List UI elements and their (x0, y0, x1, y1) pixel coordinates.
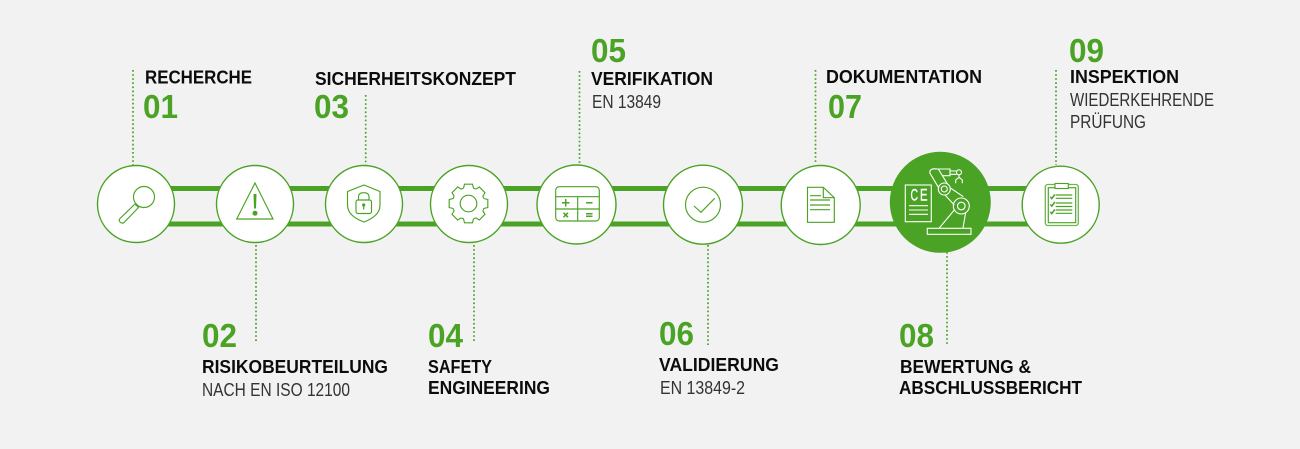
label: validierung (659, 315, 779, 398)
icon: calculator (537, 165, 616, 244)
label: inspektion: PRÜFUNG (1070, 112, 1146, 132)
label: risikobeurteilung: RISIKOBEURTEILUNG (202, 357, 388, 377)
label: risikobeurteilung (202, 317, 388, 400)
step 04: safety engineering (428, 166, 550, 398)
icon: warning triangle (216, 166, 294, 242)
label: validierung: VALIDIERUNG (659, 355, 779, 375)
label: safety engineering: SAFETY (428, 357, 492, 377)
label: verifikation: EN 13849 (592, 92, 661, 112)
icon: robot arm with CE document (890, 152, 991, 253)
label: bewertung und abschlussbericht: 08 (899, 317, 934, 354)
label: risikobeurteilung: 02 (202, 317, 237, 354)
icon: shield with lock (326, 166, 402, 242)
label: bewertung und abschlussbericht (899, 317, 1082, 398)
label: verifikation: 05 (591, 32, 626, 69)
label: recherche (143, 68, 252, 125)
icon: clipboard (1022, 166, 1099, 243)
label: dokumentation (826, 67, 982, 125)
label: risikobeurteilung: NACH EN ISO 12100 (202, 380, 350, 400)
label: sicherheitskonzept: SICHERHEITSKONZEPT (315, 69, 516, 89)
label: verifikation (591, 32, 713, 112)
label: bewertung und abschlussbericht: ABSCHLUSSBERICHT (899, 378, 1082, 398)
icon: robot arm with CE document: E (920, 187, 928, 205)
label: dokumentation: 07 (828, 88, 862, 125)
step 05: verifikation (537, 32, 713, 244)
icon: check mark (664, 165, 742, 244)
label: dokumentation: DOKUMENTATION (826, 67, 982, 87)
step 01: recherche (98, 68, 252, 242)
label: safety engineering: ENGINEERING (428, 378, 550, 398)
label: inspektion: INSPEKTION (1070, 67, 1179, 87)
step 06: validierung (659, 165, 779, 398)
label: inspektion: 09 (1069, 32, 1104, 69)
label: inspektion (1069, 32, 1214, 132)
label: sicherheitskonzept (314, 69, 516, 125)
icon: gear (430, 166, 508, 242)
label: recherche: RECHERCHE (145, 68, 252, 88)
icon: document (781, 166, 860, 244)
label: bewertung und abschlussbericht: BEWERTUNG & (900, 357, 1031, 377)
icon: robot arm with CE document: C (910, 187, 918, 205)
timeline bars (130, 186, 1060, 226)
step 09: inspektion (1022, 32, 1214, 243)
step 08: bewertung und abschlussbericht (890, 152, 1082, 398)
label: safety engineering (428, 317, 550, 398)
label: verifikation: VERIFIKATION (591, 69, 713, 89)
label: sicherheitskonzept: 03 (314, 88, 349, 125)
step 07: dokumentation (781, 67, 982, 244)
label: validierung: EN 13849-2 (660, 378, 745, 398)
step 02: risikobeurteilung (202, 166, 388, 400)
label: validierung: 06 (659, 315, 694, 352)
label: recherche: 01 (143, 88, 178, 125)
label: safety engineering: 04 (428, 317, 464, 354)
icon: magnifying glass (98, 166, 174, 242)
label: inspektion: WIEDERKEHRENDE (1070, 90, 1214, 110)
step 03: sicherheitskonzept (314, 69, 516, 242)
